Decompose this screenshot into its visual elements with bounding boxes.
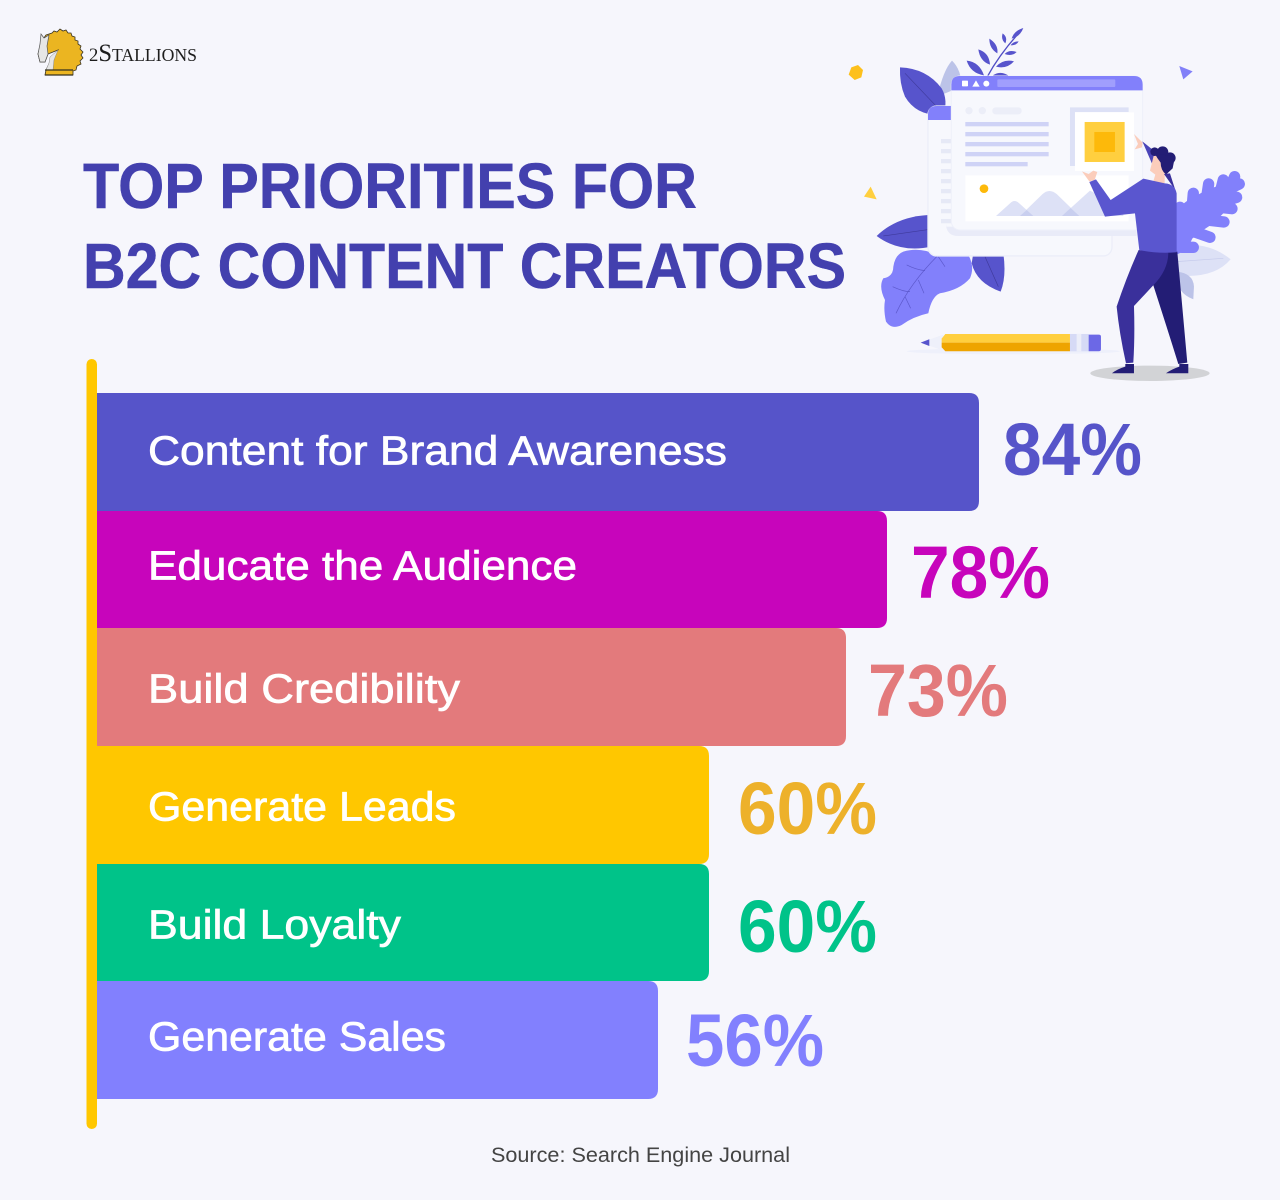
source note: Source: Search Engine Journal bbox=[491, 1144, 790, 1167]
title: TOP PRIORITIES FOR bbox=[83, 150, 697, 222]
bar: Content for Brand Awareness: 84% bbox=[1003, 408, 1142, 491]
bar: Content for Brand Awareness: Content for Brand Awareness bbox=[148, 428, 727, 474]
bar chart: priorities bbox=[86, 359, 1142, 1129]
logo: 2Stallions bbox=[38, 29, 197, 75]
bar: Build Loyalty: 60% bbox=[738, 885, 877, 968]
person bbox=[1082, 134, 1210, 381]
illustration: person arranging a web page bbox=[849, 28, 1239, 381]
hair bbox=[1150, 146, 1176, 175]
pencil bbox=[907, 334, 1120, 354]
raised arm bbox=[1142, 141, 1157, 167]
axis line bbox=[86, 359, 97, 1129]
bar: Educate the Audience bbox=[97, 511, 1050, 628]
bar: Generate Sales bbox=[97, 981, 824, 1099]
icon: horse head bbox=[38, 29, 83, 75]
hands bbox=[1082, 134, 1143, 181]
torso bbox=[1089, 179, 1177, 253]
bar: Generate Leads bbox=[87, 746, 877, 864]
shoes bbox=[1112, 364, 1188, 373]
neck and face bbox=[1150, 155, 1165, 183]
bar: Content for Brand Awareness bbox=[97, 393, 1142, 511]
bar: Educate the Audience: Educate the Audience bbox=[148, 542, 577, 588]
bar: Generate Leads: Generate Leads bbox=[148, 784, 456, 830]
leaves behind person bbox=[1173, 177, 1239, 299]
bar: Educate the Audience: 78% bbox=[911, 531, 1050, 614]
title bbox=[83, 150, 846, 302]
logo wordmark: 2STALLIONS bbox=[89, 40, 197, 67]
trousers bbox=[1147, 252, 1187, 364]
title: B2C CONTENT CREATORS bbox=[83, 230, 846, 302]
bar: Build Loyalty: Build Loyalty bbox=[148, 902, 402, 948]
ponytail bbox=[1164, 173, 1175, 190]
bar: Generate Sales: 56% bbox=[686, 999, 824, 1082]
bar: Build Credibility: Build Credibility bbox=[148, 666, 461, 712]
front browser window bbox=[946, 76, 1143, 236]
bar: Build Loyalty bbox=[97, 864, 877, 981]
bar: Build Credibility bbox=[97, 628, 1008, 746]
back browser window bbox=[928, 106, 1112, 256]
bar: Build Credibility: 73% bbox=[868, 649, 1008, 732]
decorative shapes bbox=[849, 65, 1193, 199]
bar: Generate Sales: Generate Sales bbox=[148, 1014, 446, 1060]
leaves behind window bbox=[877, 28, 1023, 327]
bar: Generate Leads: 60% bbox=[738, 767, 877, 850]
shadow bbox=[1090, 366, 1210, 381]
